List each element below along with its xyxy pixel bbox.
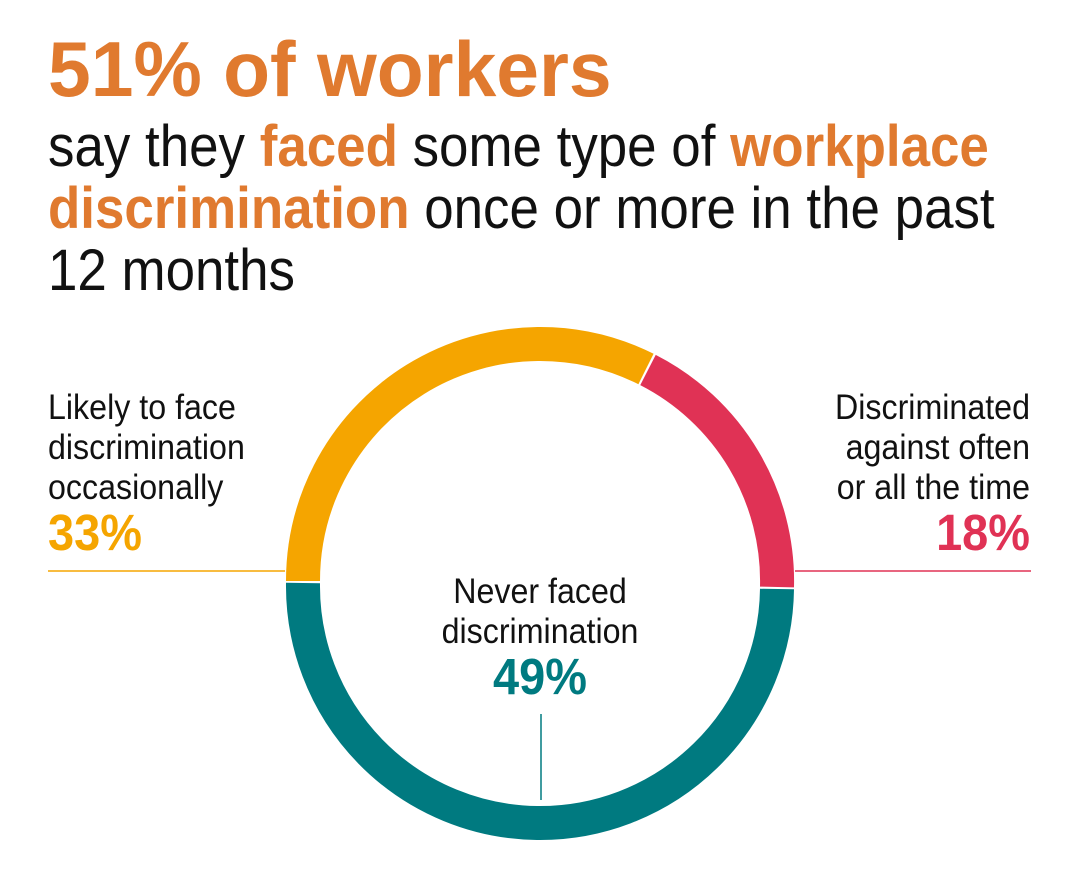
subtitle: 12 months [48, 238, 295, 303]
subtitle: say they faced some type of workplace [48, 114, 989, 179]
segment: occasionally 33% [303, 344, 646, 581]
label: often: 18% [936, 504, 1030, 561]
subtitle [48, 114, 995, 303]
label: occasionally: occasionally [48, 468, 223, 507]
label: often [835, 388, 1030, 561]
leader line: left [48, 570, 285, 572]
label: occasionally: discrimination [48, 428, 245, 467]
label: never: Never faced [453, 572, 627, 611]
title: 51% of workers [48, 25, 612, 113]
leader line: right [795, 570, 1031, 572]
label: often: against often [846, 428, 1030, 467]
label: often: Discriminated [835, 388, 1030, 427]
segment: often 18% [648, 370, 777, 587]
label: occasionally: Likely to face [48, 388, 236, 427]
subtitle: discrimination once or more in the past [48, 176, 995, 241]
label: never: 49% [493, 648, 587, 705]
label: never: discrimination [442, 612, 638, 651]
leader line: center [540, 714, 542, 800]
label: never [442, 572, 638, 705]
label: occasionally [48, 388, 245, 561]
label: often: or all the time [837, 468, 1030, 507]
segment: never 49% [303, 583, 777, 823]
label: occasionally: 33% [48, 504, 142, 561]
